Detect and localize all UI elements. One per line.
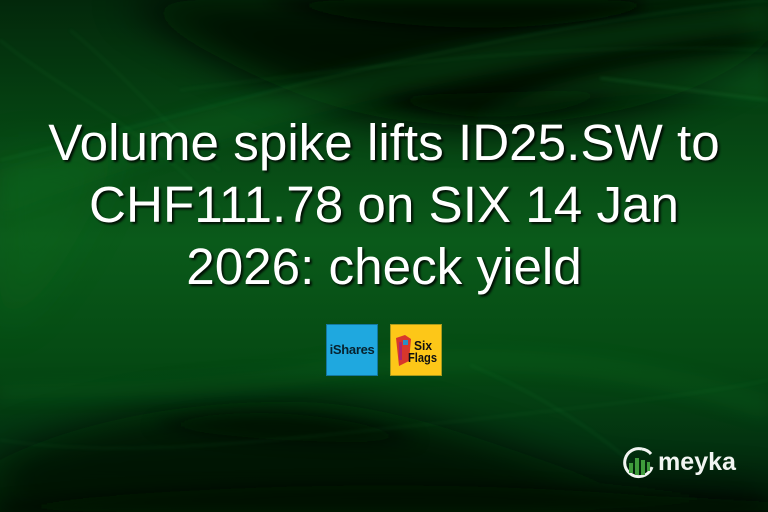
logo: Six Flags: Six: [414, 338, 433, 353]
logo: iShares: [326, 324, 378, 376]
title: [48, 114, 720, 298]
icon: ring with bars: [625, 449, 652, 477]
logo: meyka: [623, 447, 737, 478]
logo: Six Flags: Flags: [408, 350, 437, 365]
logo: Six Flags: [390, 324, 442, 376]
title: 2026: check yield: [186, 238, 582, 295]
logo: iShares: iShares: [330, 342, 374, 357]
title: CHF111.78 on SIX 14 Jan: [89, 176, 679, 233]
title: Volume spike lifts ID25.SW to: [48, 114, 720, 171]
wordmark: meyka: [658, 448, 737, 476]
